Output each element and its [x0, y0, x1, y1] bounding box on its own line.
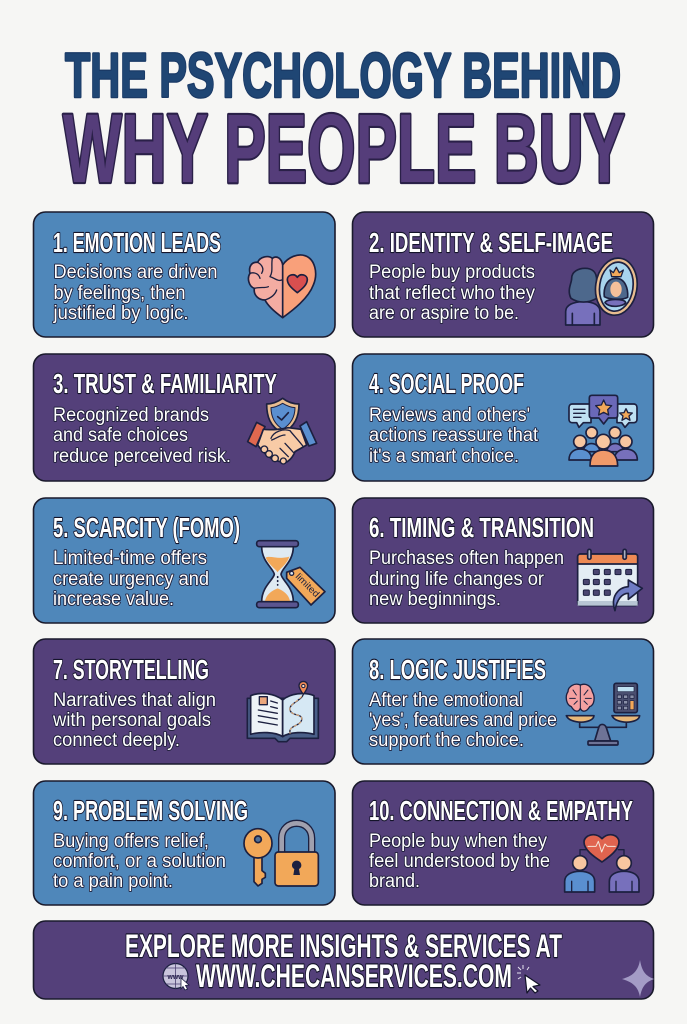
body 9: Buying offers relief,: [53, 831, 209, 852]
sparkle watermark: [622, 960, 654, 997]
footer url: WWW.CHECANSERVICES.COM: [196, 958, 512, 994]
heading 1: 1. EMOTION LEADS: [53, 227, 221, 258]
body 9: to a pain point.: [53, 871, 173, 892]
heading 5: 5. SCARCITY (FOMO): [53, 512, 240, 543]
icon: click cursor: [517, 965, 540, 993]
panel: 10 connection and empathy: [352, 781, 654, 905]
icon: hourglass with limited tag: [257, 541, 325, 608]
body 2: [369, 262, 535, 324]
heading 3: 3. TRUST & FAMILIARITY: [53, 368, 277, 399]
body 1: by feelings, then: [54, 283, 186, 304]
body 10: feel understood by the: [369, 851, 550, 872]
icon: shield and handshake: [248, 398, 317, 464]
heading 4: 4. SOCIAL PROOF: [369, 368, 524, 399]
body 4: Reviews and others': [369, 405, 530, 426]
icon: key and padlock: [244, 823, 318, 886]
panel: 6 timing and transition: [352, 498, 654, 623]
body 10: [369, 831, 550, 892]
body 2: that reflect who they: [369, 283, 535, 304]
body 8: After the emotional: [369, 690, 523, 711]
body 7: with personal goals: [52, 710, 211, 731]
body 6: [369, 548, 564, 610]
icon: brain and heart: [248, 255, 316, 318]
body 3: Recognized brands: [53, 405, 209, 426]
body 4: [369, 405, 539, 467]
body 5: increase value.: [53, 589, 174, 610]
body 8: 'yes', features and price: [369, 710, 557, 731]
body 6: Purchases often happen: [369, 548, 564, 569]
body 2: People buy products: [369, 262, 535, 283]
panel: 4 social proof: [352, 354, 654, 481]
body 7: [52, 690, 216, 751]
icon: person and mirror: [566, 255, 641, 325]
icon: reviews and group of people: [569, 395, 637, 466]
heading 7: 7. STORYTELLING: [53, 654, 209, 685]
body 8: [369, 690, 557, 751]
body 9: [53, 831, 226, 892]
panel: 9 problem solving: [34, 781, 335, 905]
body 3: reduce perceived risk.: [53, 446, 231, 467]
icon: calendar with arrow: [578, 549, 642, 611]
body 5: [53, 548, 209, 610]
footer banner: [34, 921, 654, 999]
heading 8: 8. LOGIC JUSTIFIES: [369, 654, 546, 685]
panel: 3 trust and familiarity: [34, 354, 335, 481]
body 3: [53, 405, 231, 467]
body 1: [53, 262, 217, 324]
body 5: create urgency and: [53, 569, 209, 590]
body 5: Limited-time offers: [53, 548, 207, 569]
body 1: justified by logic.: [53, 303, 188, 324]
body 2: are or aspire to be.: [369, 303, 519, 324]
panel: 8 logic justifies: [352, 639, 654, 764]
body 3: and safe choices: [53, 425, 188, 446]
icon: open book with path: [247, 681, 318, 742]
body 6: during life changes or: [369, 569, 545, 590]
panel: 5 scarcity: [34, 498, 335, 623]
body 9: comfort, or a solution: [53, 851, 226, 872]
body 4: actions reassure that: [369, 425, 539, 446]
icon: two people connected by heart: [565, 835, 639, 892]
panel: 7 storytelling: [34, 639, 335, 764]
body 8: support the choice.: [369, 730, 524, 751]
body 10: brand.: [369, 871, 420, 892]
heading 9: 9. PROBLEM SOLVING: [53, 795, 248, 826]
body 1: Decisions are driven: [54, 262, 218, 283]
body 7: connect deeply.: [53, 730, 180, 751]
body 7: Narratives that align: [53, 690, 216, 711]
panel: 2 identity and self-image: [352, 212, 654, 337]
title: [63, 41, 625, 203]
icon: globe with cursor: [163, 964, 189, 990]
tag label: limited: [294, 571, 321, 599]
icon: balance with brain and calculator: [566, 683, 640, 745]
body 10: People buy when they: [369, 831, 547, 852]
globe label: www: [167, 974, 184, 981]
body 4: it's a smart choice.: [369, 446, 519, 467]
body 6: new beginnings.: [369, 589, 501, 610]
panel: 1 emotion leads: [34, 212, 335, 337]
